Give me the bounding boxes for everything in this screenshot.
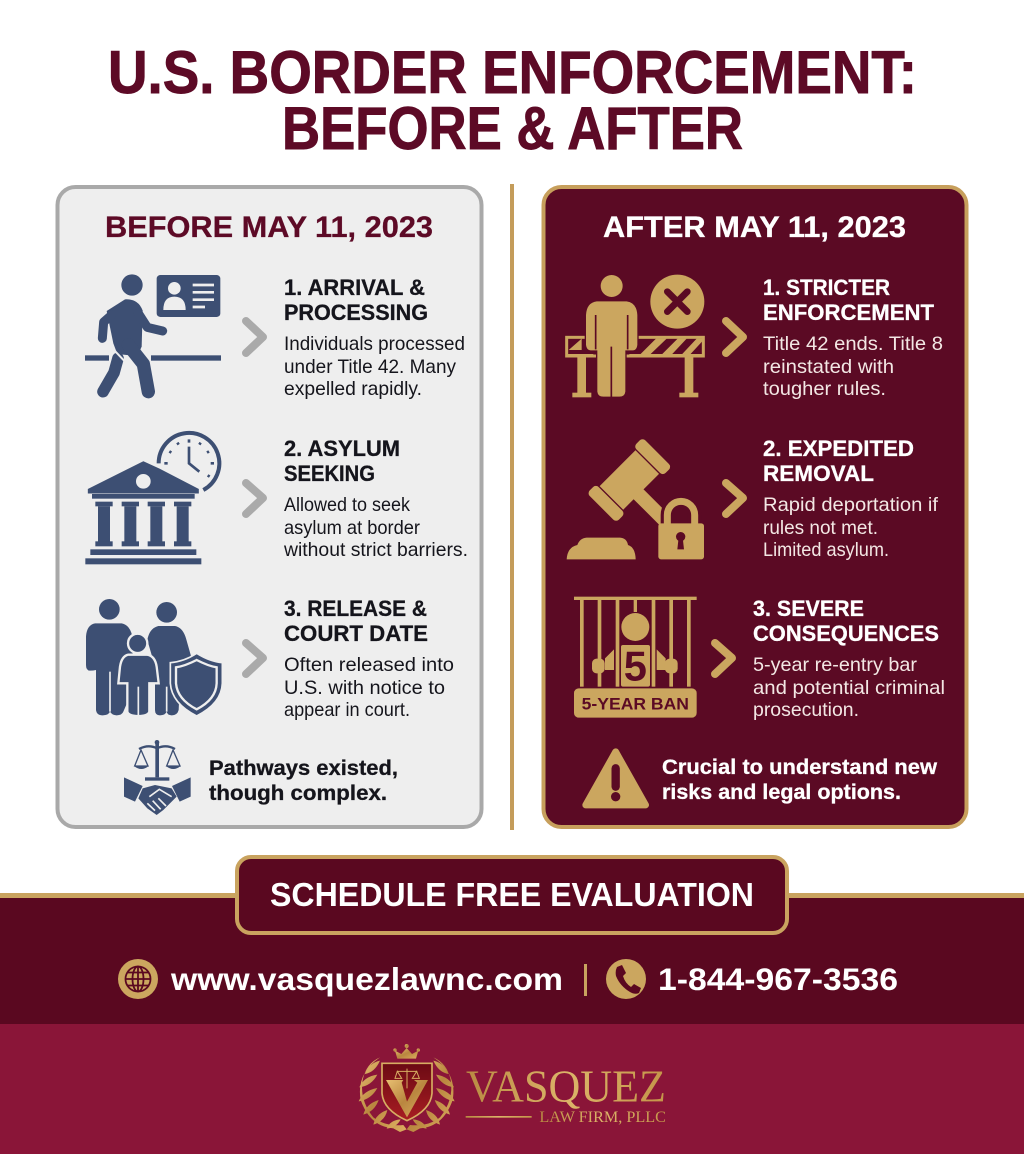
icon: person at barrier with X — [567, 275, 704, 397]
icon: gavel with padlock — [567, 438, 704, 559]
text: asylum seeking: 2. ASYLUM — [284, 436, 400, 461]
panel heading: after: AFTER MAY 11, 2023 — [603, 211, 906, 244]
icon: courthouse with clock — [85, 433, 219, 564]
arrow: step 1 — [726, 321, 743, 353]
text: stricter enforcement: reinstated with — [763, 356, 894, 378]
text: release and court date: Often released into — [284, 654, 454, 676]
text: asylum seeking — [283, 436, 468, 561]
text: stricter enforcement: Title 42 ends. Title 8 — [763, 333, 943, 355]
text: arrival and processing — [284, 275, 465, 400]
icon: scales and handshake — [124, 740, 191, 815]
text: stricter enforcement — [763, 275, 943, 400]
V emblem — [386, 1080, 428, 1117]
text: stricter enforcement: 1. STRICTER — [763, 275, 890, 300]
text: expedited removal — [763, 436, 939, 561]
text: expedited removal: REMOVAL — [763, 461, 874, 486]
text: severe consequences — [753, 596, 945, 721]
text: release and court date — [284, 596, 454, 721]
closing note: after: Crucial to understand new — [662, 755, 937, 779]
text: expedited removal: 2. EXPEDITED — [763, 436, 914, 461]
closing note: before — [209, 756, 398, 805]
arrow: step 3 — [246, 643, 263, 674]
text: expedited removal: rules not met. — [763, 517, 878, 539]
text: severe consequences: 3. SEVERE — [753, 596, 864, 621]
phone number: 1-844-967-3536 — [658, 961, 898, 997]
website: www.vasquezlawnc.com — [170, 961, 563, 997]
icon: walking person with ID card — [85, 274, 221, 392]
arrow: step 1 — [246, 321, 263, 353]
icon: globe — [118, 959, 158, 999]
icon: warning triangle — [586, 752, 646, 805]
text: release and court date: U.S. with notice to — [284, 677, 445, 699]
text: severe consequences: CONSEQUENCES — [753, 621, 939, 646]
closing note: before: though complex. — [209, 781, 387, 805]
text: expedited removal: Limited asylum. — [763, 539, 889, 561]
text: severe consequences: prosecution. — [753, 699, 859, 721]
panel: after May 11, 2023 — [544, 187, 966, 827]
wordmark: VASQUEZ — [466, 1061, 666, 1112]
text: stricter enforcement: ENFORCEMENT — [763, 300, 935, 325]
scales — [395, 1069, 419, 1088]
arrow: step 2 — [246, 483, 263, 514]
title: U.S. BORDER ENFORCEMENT: — [108, 39, 917, 106]
text: arrival and processing: under Title 42. Many — [284, 356, 456, 378]
button: schedule free evaluation — [237, 857, 787, 933]
contact band — [0, 893, 1024, 1024]
text: severe consequences: and potential criminal — [753, 677, 945, 699]
shield — [382, 1063, 432, 1121]
text: release and court date: COURT DATE — [284, 621, 428, 646]
panel: before May 11, 2023 — [58, 187, 482, 827]
laurel wreath — [359, 1057, 455, 1132]
arrow: step 3 — [715, 643, 732, 674]
text: arrival and processing: expelled rapidly. — [284, 378, 422, 400]
panel heading: before: BEFORE MAY 11, 2023 — [105, 211, 433, 244]
text: release and court date: appear in court. — [284, 699, 410, 721]
text: severe consequences: 5-year re-entry bar — [753, 654, 918, 676]
wordmark subtitle: LAW FIRM, PLLC — [539, 1109, 666, 1126]
logo band — [0, 1024, 1024, 1154]
icon: person behind bars, 5-year ban — [574, 597, 697, 718]
text: asylum seeking: asylum at border — [284, 517, 420, 539]
wordmark rule — [466, 1116, 532, 1118]
title: BEFORE & AFTER — [282, 95, 743, 162]
text: asylum seeking: SEEKING — [284, 461, 375, 486]
text: expedited removal: Rapid deportation if — [763, 494, 939, 516]
button: schedule free evaluation: SCHEDULE FREE EVALUATION — [270, 876, 754, 913]
logo: Vasquez Law Firm crest — [359, 1044, 666, 1132]
title — [108, 39, 917, 162]
arrow: step 2 — [726, 483, 743, 514]
text: arrival and processing: PROCESSING — [284, 300, 428, 325]
closing note: after: risks and legal options. — [662, 780, 901, 804]
text: asylum seeking: Allowed to seek — [284, 494, 410, 516]
crown — [393, 1044, 420, 1059]
closing note: before: Pathways existed, — [209, 756, 398, 780]
icon: person behind bars, 5-year ban: 5-YEAR BAN — [582, 694, 689, 713]
text: arrival and processing: 1. ARRIVAL & — [284, 275, 425, 300]
text: asylum seeking: without strict barriers. — [283, 539, 468, 561]
icon: phone — [606, 959, 646, 999]
icon: family with shield — [86, 599, 222, 716]
contact separator — [584, 964, 587, 996]
closing note: after — [662, 755, 937, 804]
text: stricter enforcement: tougher rules. — [763, 378, 886, 400]
text: arrival and processing: Individuals processed — [284, 333, 465, 355]
text: release and court date: 3. RELEASE & — [284, 596, 427, 621]
icon: person behind bars, 5-year ban: 5 — [624, 643, 647, 690]
center divider — [510, 184, 514, 830]
